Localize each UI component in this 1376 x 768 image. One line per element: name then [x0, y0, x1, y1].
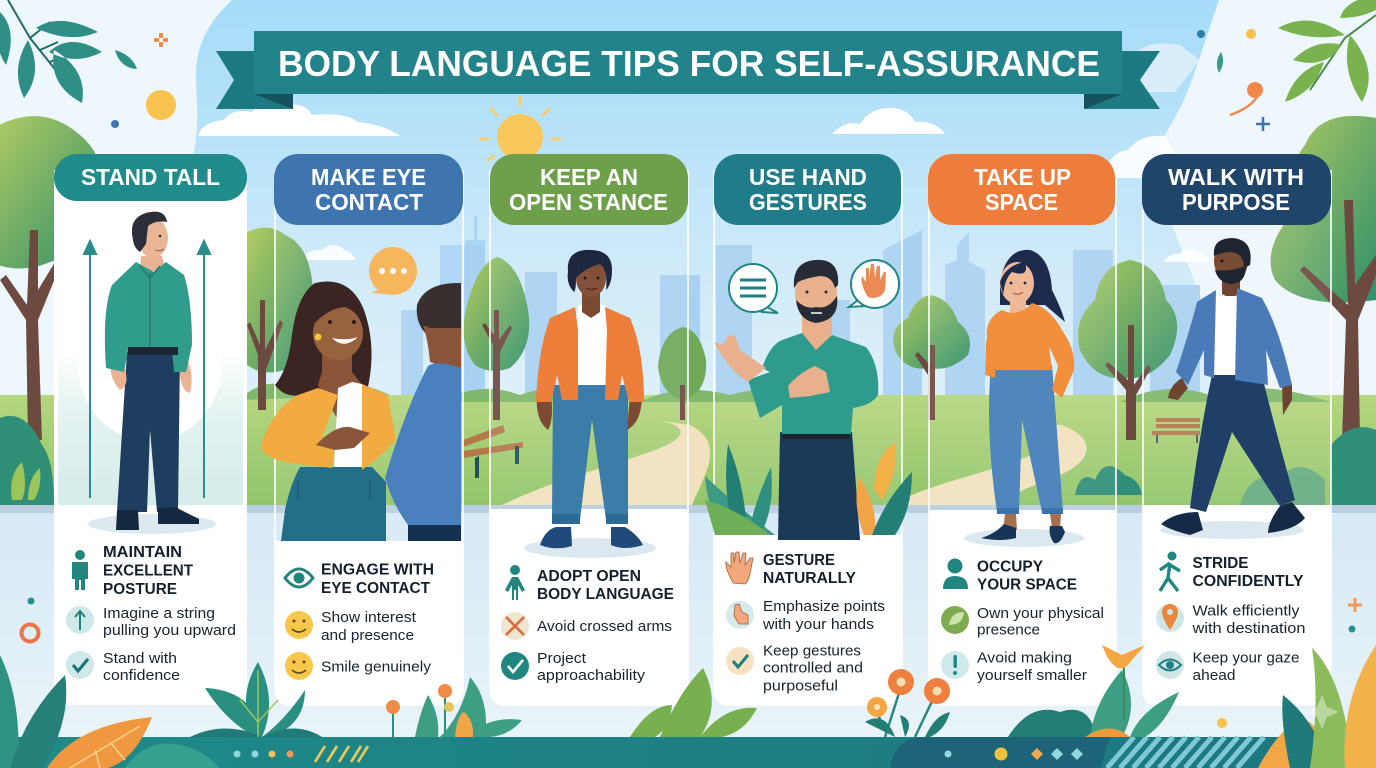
- panel frame: [929, 170, 1116, 705]
- tip text: presence: [977, 622, 1040, 638]
- pill label: STAND TALL: [81, 164, 220, 190]
- background: park ground: [0, 381, 1376, 737]
- tip text: with destination: [1191, 620, 1306, 637]
- banner bar: [254, 31, 1122, 94]
- pill label: KEEP AN: [540, 164, 638, 190]
- panel 1: stand tall: [54, 154, 247, 705]
- panel frame: [490, 170, 688, 705]
- foreground plants: center-left: [190, 662, 322, 737]
- sun: [480, 97, 560, 160]
- figure: person open stance: [524, 250, 656, 558]
- heading: POSTURE: [103, 581, 177, 598]
- icon: up arrow: [66, 606, 94, 634]
- footer hatch: [1107, 737, 1264, 768]
- pill: [928, 154, 1115, 225]
- figure: man gesturing: [714, 260, 878, 540]
- footer slashes: [315, 746, 368, 762]
- pill: [274, 154, 463, 225]
- figure: woman standing wide: [964, 250, 1084, 547]
- heading: EYE CONTACT: [321, 580, 431, 597]
- tip text: Keep your gaze: [1192, 650, 1300, 666]
- tip text: pulling you upward: [103, 622, 236, 639]
- tree: panel 1-2 gap: [247, 228, 315, 410]
- icon: check: [66, 651, 94, 679]
- heading: GESTURE: [763, 552, 835, 569]
- foreground plants: left of right: [1008, 645, 1227, 737]
- decorations: dots and marks: [22, 29, 1362, 642]
- icon: person: [505, 565, 525, 600]
- foreground plants: center: [630, 668, 757, 737]
- panel lower card: [1143, 505, 1331, 705]
- tree: panel 3 right: [658, 327, 706, 420]
- pill label: PURPOSE: [1182, 189, 1290, 215]
- heading: MAINTAIN: [103, 544, 182, 561]
- tip text: controlled and: [763, 660, 863, 676]
- pill label: [311, 164, 426, 215]
- title: BODY LANGUAGE TIPS FOR SELF-ASSURANCE: [278, 43, 1100, 84]
- icon: x mark: [501, 612, 529, 640]
- tip text: and presence: [321, 627, 414, 644]
- icon: leaf: [941, 606, 969, 634]
- panel card: [54, 170, 247, 705]
- panel frame: [1143, 170, 1331, 705]
- pill: [490, 154, 688, 225]
- bushes: [0, 416, 1376, 505]
- heading: [537, 568, 674, 603]
- heading: [763, 552, 857, 587]
- tip text: [1191, 602, 1306, 637]
- tip text: Show interest: [321, 609, 417, 626]
- icon: person: [72, 550, 88, 590]
- tip text: Stand with: [103, 650, 177, 667]
- footer bar: [0, 737, 1376, 768]
- panel 4: use hand gestures: [705, 154, 912, 705]
- icon: exclamation: [941, 651, 969, 679]
- heading: EXCELLENT: [103, 562, 194, 580]
- icon: eye: [1156, 651, 1184, 679]
- panel lower card: [490, 509, 688, 705]
- tip text: ahead: [1192, 667, 1236, 684]
- pill: [1142, 154, 1331, 225]
- tip text: Own your physical: [977, 605, 1104, 622]
- pill label: [1168, 164, 1304, 215]
- icon: smile: [285, 611, 313, 639]
- tip text: [763, 642, 863, 694]
- banner right ribbon: [1084, 51, 1160, 109]
- tip text: Walk efficiently: [1192, 602, 1300, 620]
- tree: far left: [0, 116, 102, 440]
- icon: location pin: [1156, 604, 1184, 632]
- pill: [714, 154, 901, 225]
- heading: ENGAGE WITH: [321, 562, 434, 578]
- heading: NATURALLY: [763, 570, 857, 587]
- speech bubble: hand: [849, 260, 899, 308]
- decoration: top-right branch: [1278, 0, 1376, 102]
- footer dots right: [944, 748, 1083, 760]
- figure: standing man: [88, 212, 216, 534]
- tip text: Emphasize points: [763, 598, 885, 615]
- heading: YOUR SPACE: [977, 576, 1077, 594]
- panel 3: keep an open stance: [490, 154, 688, 705]
- panel frame: [714, 170, 902, 705]
- pill label: SPACE: [985, 189, 1058, 215]
- figure: man seen from behind: [385, 283, 461, 541]
- pill label: WALK WITH: [1168, 164, 1304, 190]
- panel lower card: [275, 541, 463, 705]
- tip text: Project: [537, 650, 587, 667]
- tip text: [1192, 650, 1300, 684]
- pill label: GESTURES: [749, 189, 867, 215]
- tip text: Avoid crossed arms: [537, 618, 672, 635]
- pill label: MAKE EYE: [311, 164, 426, 190]
- figure: woman: [261, 282, 396, 541]
- figure: man walking: [1160, 238, 1305, 539]
- tip text: [537, 650, 646, 684]
- foreground plants: flowers left: [386, 677, 522, 737]
- pill: [54, 154, 247, 201]
- foreground plants: bottom left: [0, 655, 152, 768]
- tree: panel 5 left: [893, 295, 970, 420]
- clouds: [198, 43, 1210, 338]
- tip text: approachability: [537, 667, 646, 684]
- icon: person bust: [943, 558, 968, 589]
- speech bubble: lines: [729, 264, 778, 313]
- foreground plants: bottom right: [1258, 645, 1376, 768]
- tip text: Imagine a string: [103, 605, 215, 622]
- heading: [321, 562, 434, 597]
- pill label: OPEN STANCE: [509, 189, 668, 215]
- tip text: with your hands: [762, 616, 874, 633]
- icon: check: [726, 647, 754, 675]
- heading: STRIDE: [1192, 555, 1248, 572]
- foreground plants: flowers right: [865, 669, 950, 737]
- tip text: purposeful: [763, 678, 838, 694]
- plants: [705, 442, 912, 535]
- speech bubble: [369, 247, 417, 295]
- panel lower card: [714, 535, 902, 705]
- panel 5: take up space: [928, 154, 1116, 705]
- posture arrows: [84, 241, 210, 498]
- heading: [1192, 555, 1304, 590]
- decoration: top-left branch: [0, 0, 137, 103]
- panel 2: make eye contact: [261, 154, 463, 705]
- icon: check: [501, 652, 529, 680]
- heading: CONFIDENTLY: [1192, 573, 1304, 590]
- pill label: TAKE UP: [974, 164, 1071, 190]
- heading: ADOPT OPEN: [537, 568, 641, 585]
- icon: walking person: [1160, 552, 1180, 591]
- tip text: [762, 598, 885, 633]
- tip text: Keep gestures: [763, 642, 861, 660]
- tree: far right: [1270, 116, 1376, 440]
- tip text: [103, 605, 236, 639]
- bench: far: [1152, 418, 1200, 443]
- icon: eye: [285, 569, 313, 587]
- tip text: confidence: [103, 667, 180, 684]
- footer hump left: [125, 744, 219, 768]
- tip text: [977, 650, 1087, 684]
- heading: BODY LANGUAGE: [537, 586, 674, 603]
- tip text: [103, 650, 180, 684]
- pill label: [509, 164, 668, 215]
- panel lower card: [929, 510, 1116, 705]
- heading: [977, 558, 1077, 594]
- footer dots left: [234, 750, 294, 758]
- panel 6: walk with purpose: [1142, 154, 1331, 705]
- tip text: Smile genuinely: [321, 658, 432, 676]
- heading: [103, 544, 194, 598]
- tip text: yourself smaller: [977, 667, 1087, 684]
- tree: panel 3 left: [464, 257, 529, 420]
- footer hump right: [890, 737, 1110, 768]
- pill label: USE HAND: [749, 164, 867, 190]
- pill label: [749, 164, 867, 215]
- pill label: [974, 164, 1071, 215]
- tree: panel 5 right: [1078, 260, 1177, 440]
- bench: [463, 425, 523, 478]
- tip text: [321, 609, 417, 644]
- icon: hand: [726, 552, 753, 584]
- pill label: CONTACT: [315, 189, 423, 215]
- icon: smile: [285, 652, 313, 680]
- heading: OCCUPY: [977, 558, 1044, 576]
- panel frame: [275, 170, 463, 705]
- banner left ribbon: [216, 51, 293, 109]
- city skyline: [401, 216, 1200, 420]
- icon: pointing hand: [726, 601, 754, 629]
- tip text: Avoid making: [977, 650, 1072, 666]
- tip text: [977, 605, 1104, 638]
- background: sky: [0, 0, 1376, 520]
- title banner: [216, 31, 1160, 109]
